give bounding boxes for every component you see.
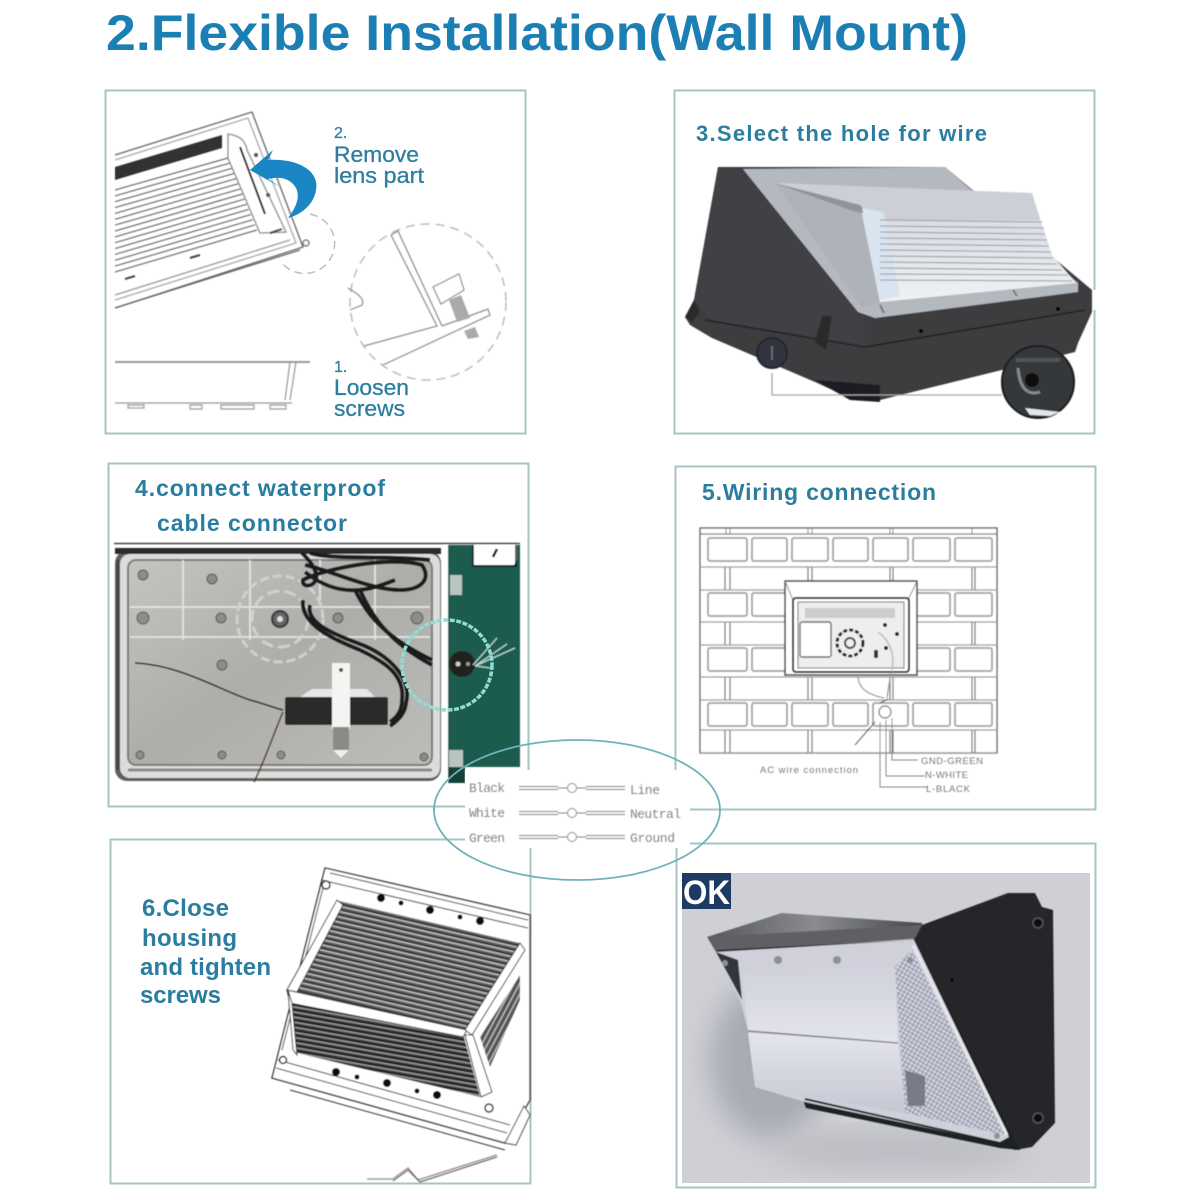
illustration: open fixture with lens (115, 112, 309, 308)
housing (115, 551, 441, 781)
wire labels: right: Line (630, 783, 660, 798)
callout: wire connection oval (434, 740, 720, 880)
callout: chain circle around connector (402, 620, 492, 710)
diagram: brick wall (700, 528, 997, 787)
panel: step 3 select the hole (674, 90, 1095, 434)
wire labels: right: Neutral (630, 807, 681, 822)
heading: step 6: and tighten (140, 954, 271, 981)
caption: 1 loosen screws: Loosen (334, 375, 409, 400)
title: 2.Flexible Installation(Wall Mount) (106, 5, 968, 61)
caption: 2 remove lens part (334, 125, 424, 188)
heading: step 6: housing (142, 925, 237, 952)
panel: step 4 waterproof connector (108, 464, 528, 806)
caption: 1 loosen screws: 1. (334, 359, 347, 376)
bracket (332, 663, 350, 729)
wires (302, 553, 432, 726)
heading: step 4 (135, 475, 385, 536)
wire labels: left: Black (469, 781, 505, 796)
caption: 1 loosen screws: screws (334, 396, 405, 421)
heading: step 4: 4.connect waterproof (135, 475, 385, 501)
heading: step 6: screws (140, 982, 221, 1009)
green background (448, 545, 520, 767)
transformer (285, 697, 388, 725)
badge: OK: OK (683, 874, 730, 912)
heading: step 6 (140, 895, 271, 1009)
heading: step 4: cable connector (157, 510, 347, 536)
labels: wire legend: GND-GREEN (921, 756, 983, 767)
photo: fixture (685, 167, 1092, 418)
leader line (772, 373, 1002, 395)
labels: wire legend (760, 756, 983, 795)
labels: wire legend: L-BLACK (926, 784, 971, 795)
wire labels: right (630, 783, 681, 846)
heading: step 5: 5.Wiring connection (702, 479, 936, 505)
leader lines (880, 718, 928, 787)
wire labels: left: Green (469, 831, 505, 846)
caption: 2 remove lens part: lens part (334, 163, 424, 188)
illustration: closed fixture (272, 868, 530, 1150)
caption: 1 loosen screws (334, 359, 409, 421)
connector symbols (519, 784, 625, 842)
illustration: fixture bottom view (115, 362, 310, 409)
heat sink wheel (237, 576, 323, 662)
wire labels: right: Ground (630, 831, 675, 846)
labels: wire legend: AC wire connection (760, 765, 858, 776)
caption: 2 remove lens part: Remove (334, 142, 419, 167)
wire labels: left: White (469, 806, 505, 821)
panel: OK finished fixture (676, 844, 1096, 1188)
heading: step 3: 3.Select the hole for wire (696, 121, 987, 146)
panel: step 6 close housing (110, 840, 530, 1184)
caption: 2 remove lens part: 2. (334, 125, 347, 142)
labels: wire legend: N-WHITE (925, 770, 968, 781)
cable gland (449, 651, 475, 677)
wires from fixture (858, 672, 891, 698)
heading: step 6: 6.Close (142, 895, 229, 922)
panel: step 5 wiring connection (676, 466, 1096, 810)
arrow: remove lens (250, 150, 316, 218)
knock-out hole (757, 338, 787, 368)
fixture on wall (785, 581, 917, 675)
illustration: cord (367, 1155, 497, 1182)
photo: finished fixture (682, 873, 1090, 1183)
detail circle: small dashed (281, 214, 335, 274)
wire labels: left (469, 781, 505, 846)
photo: open housing (114, 544, 520, 783)
detail circle: screw closeup (348, 224, 506, 380)
inset: wire hole closeup (1002, 346, 1074, 418)
panel: step 2 remove lens (106, 90, 526, 434)
